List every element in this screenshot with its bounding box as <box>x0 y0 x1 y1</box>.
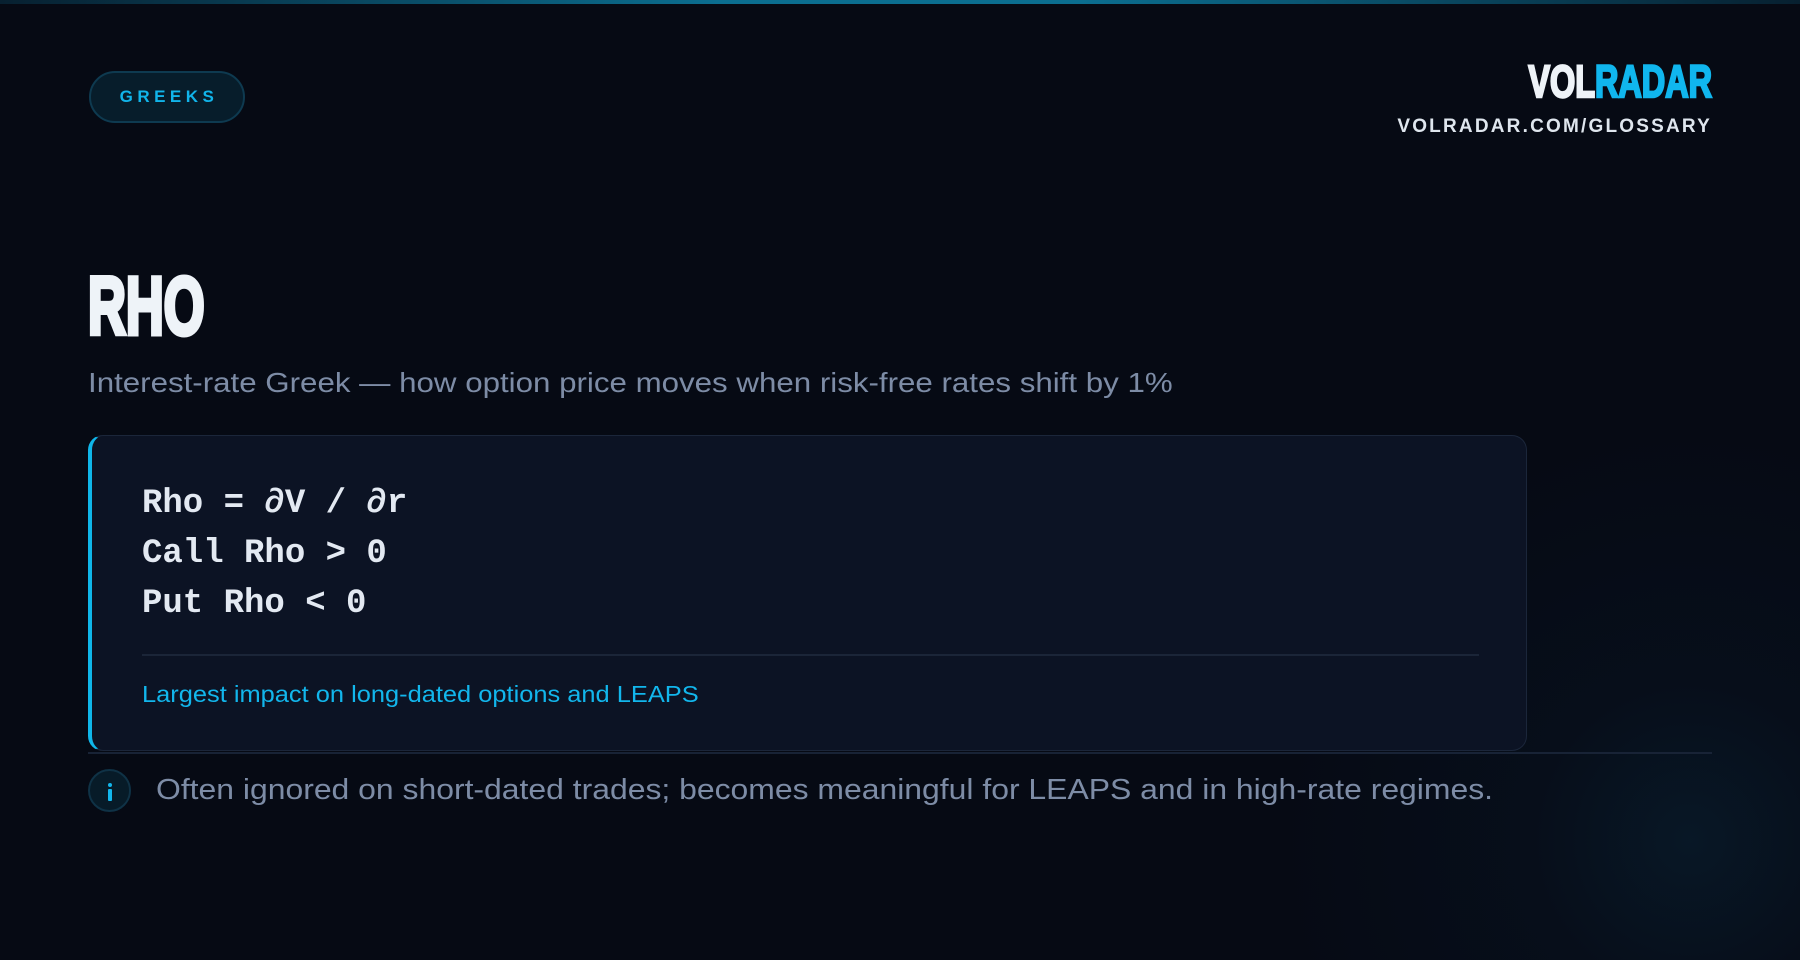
note: Largest impact on long-dated options and LEAPS <box>142 681 699 707</box>
tag pill: greeks: GREEKS <box>120 87 218 106</box>
url: VOLRADAR.COM/GLOSSARY <box>1397 116 1712 137</box>
title: RHO <box>88 261 205 352</box>
logo: VOLRADAR <box>1528 56 1712 107</box>
info text: Often ignored on short-dated trades; becomes meaningful for LEAPS and in high-rate regimes. <box>156 774 1493 806</box>
subtitle: Interest-rate Greek — how option price moves when risk-free rates shift by 1% <box>88 367 1173 398</box>
formula lines: Rho = ∂V / ∂r Call Rho > 0 Put Rho < 0 <box>142 485 407 623</box>
panel: formula card <box>88 435 1527 751</box>
icon: info <box>88 769 131 812</box>
tag pill: greeks <box>89 71 245 123</box>
